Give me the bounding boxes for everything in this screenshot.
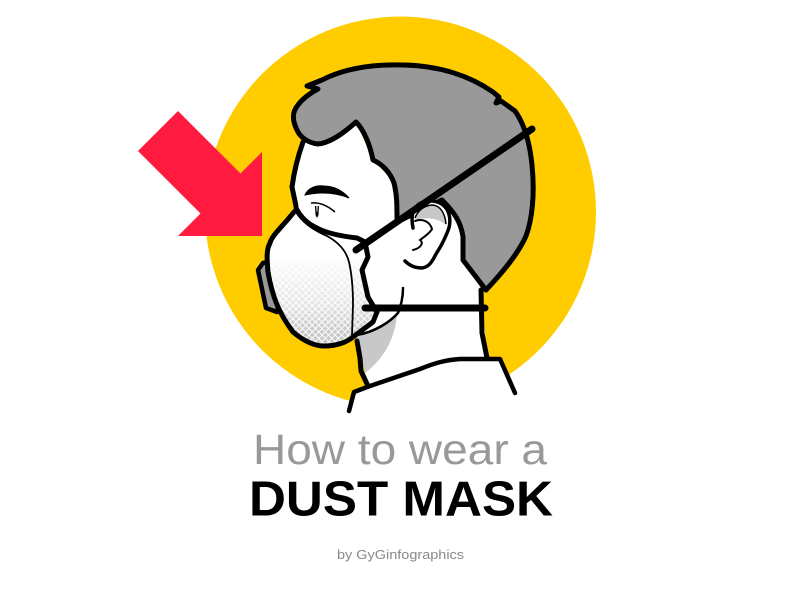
- yellow circle background: [205, 16, 596, 408]
- eyebrow: [305, 186, 349, 198]
- eye: [311, 203, 335, 218]
- collar: [349, 359, 515, 411]
- infographic: [138, 16, 596, 562]
- neck shadow: [356, 316, 397, 373]
- title line 2: DUST MASK: [249, 472, 553, 526]
- neck outlines: [357, 290, 487, 386]
- hair: [293, 65, 533, 290]
- upper strap: [356, 129, 532, 250]
- title line 1: How to wear a: [253, 426, 547, 474]
- mask body: [267, 212, 377, 346]
- mask seam: [298, 215, 353, 335]
- face outline: [292, 142, 303, 206]
- mask filter cap: [258, 262, 279, 312]
- lower strap: [365, 304, 485, 312]
- red arrow: [138, 111, 262, 236]
- mask mesh: [270, 269, 374, 344]
- jaw line: [357, 288, 403, 335]
- figure: head with dust mask: [258, 65, 533, 420]
- face, head and neck skin: [292, 122, 487, 386]
- mask outline: [267, 208, 377, 346]
- byline: by GyGinfographics: [337, 547, 465, 562]
- ear: [405, 201, 450, 268]
- shirt: [349, 359, 520, 420]
